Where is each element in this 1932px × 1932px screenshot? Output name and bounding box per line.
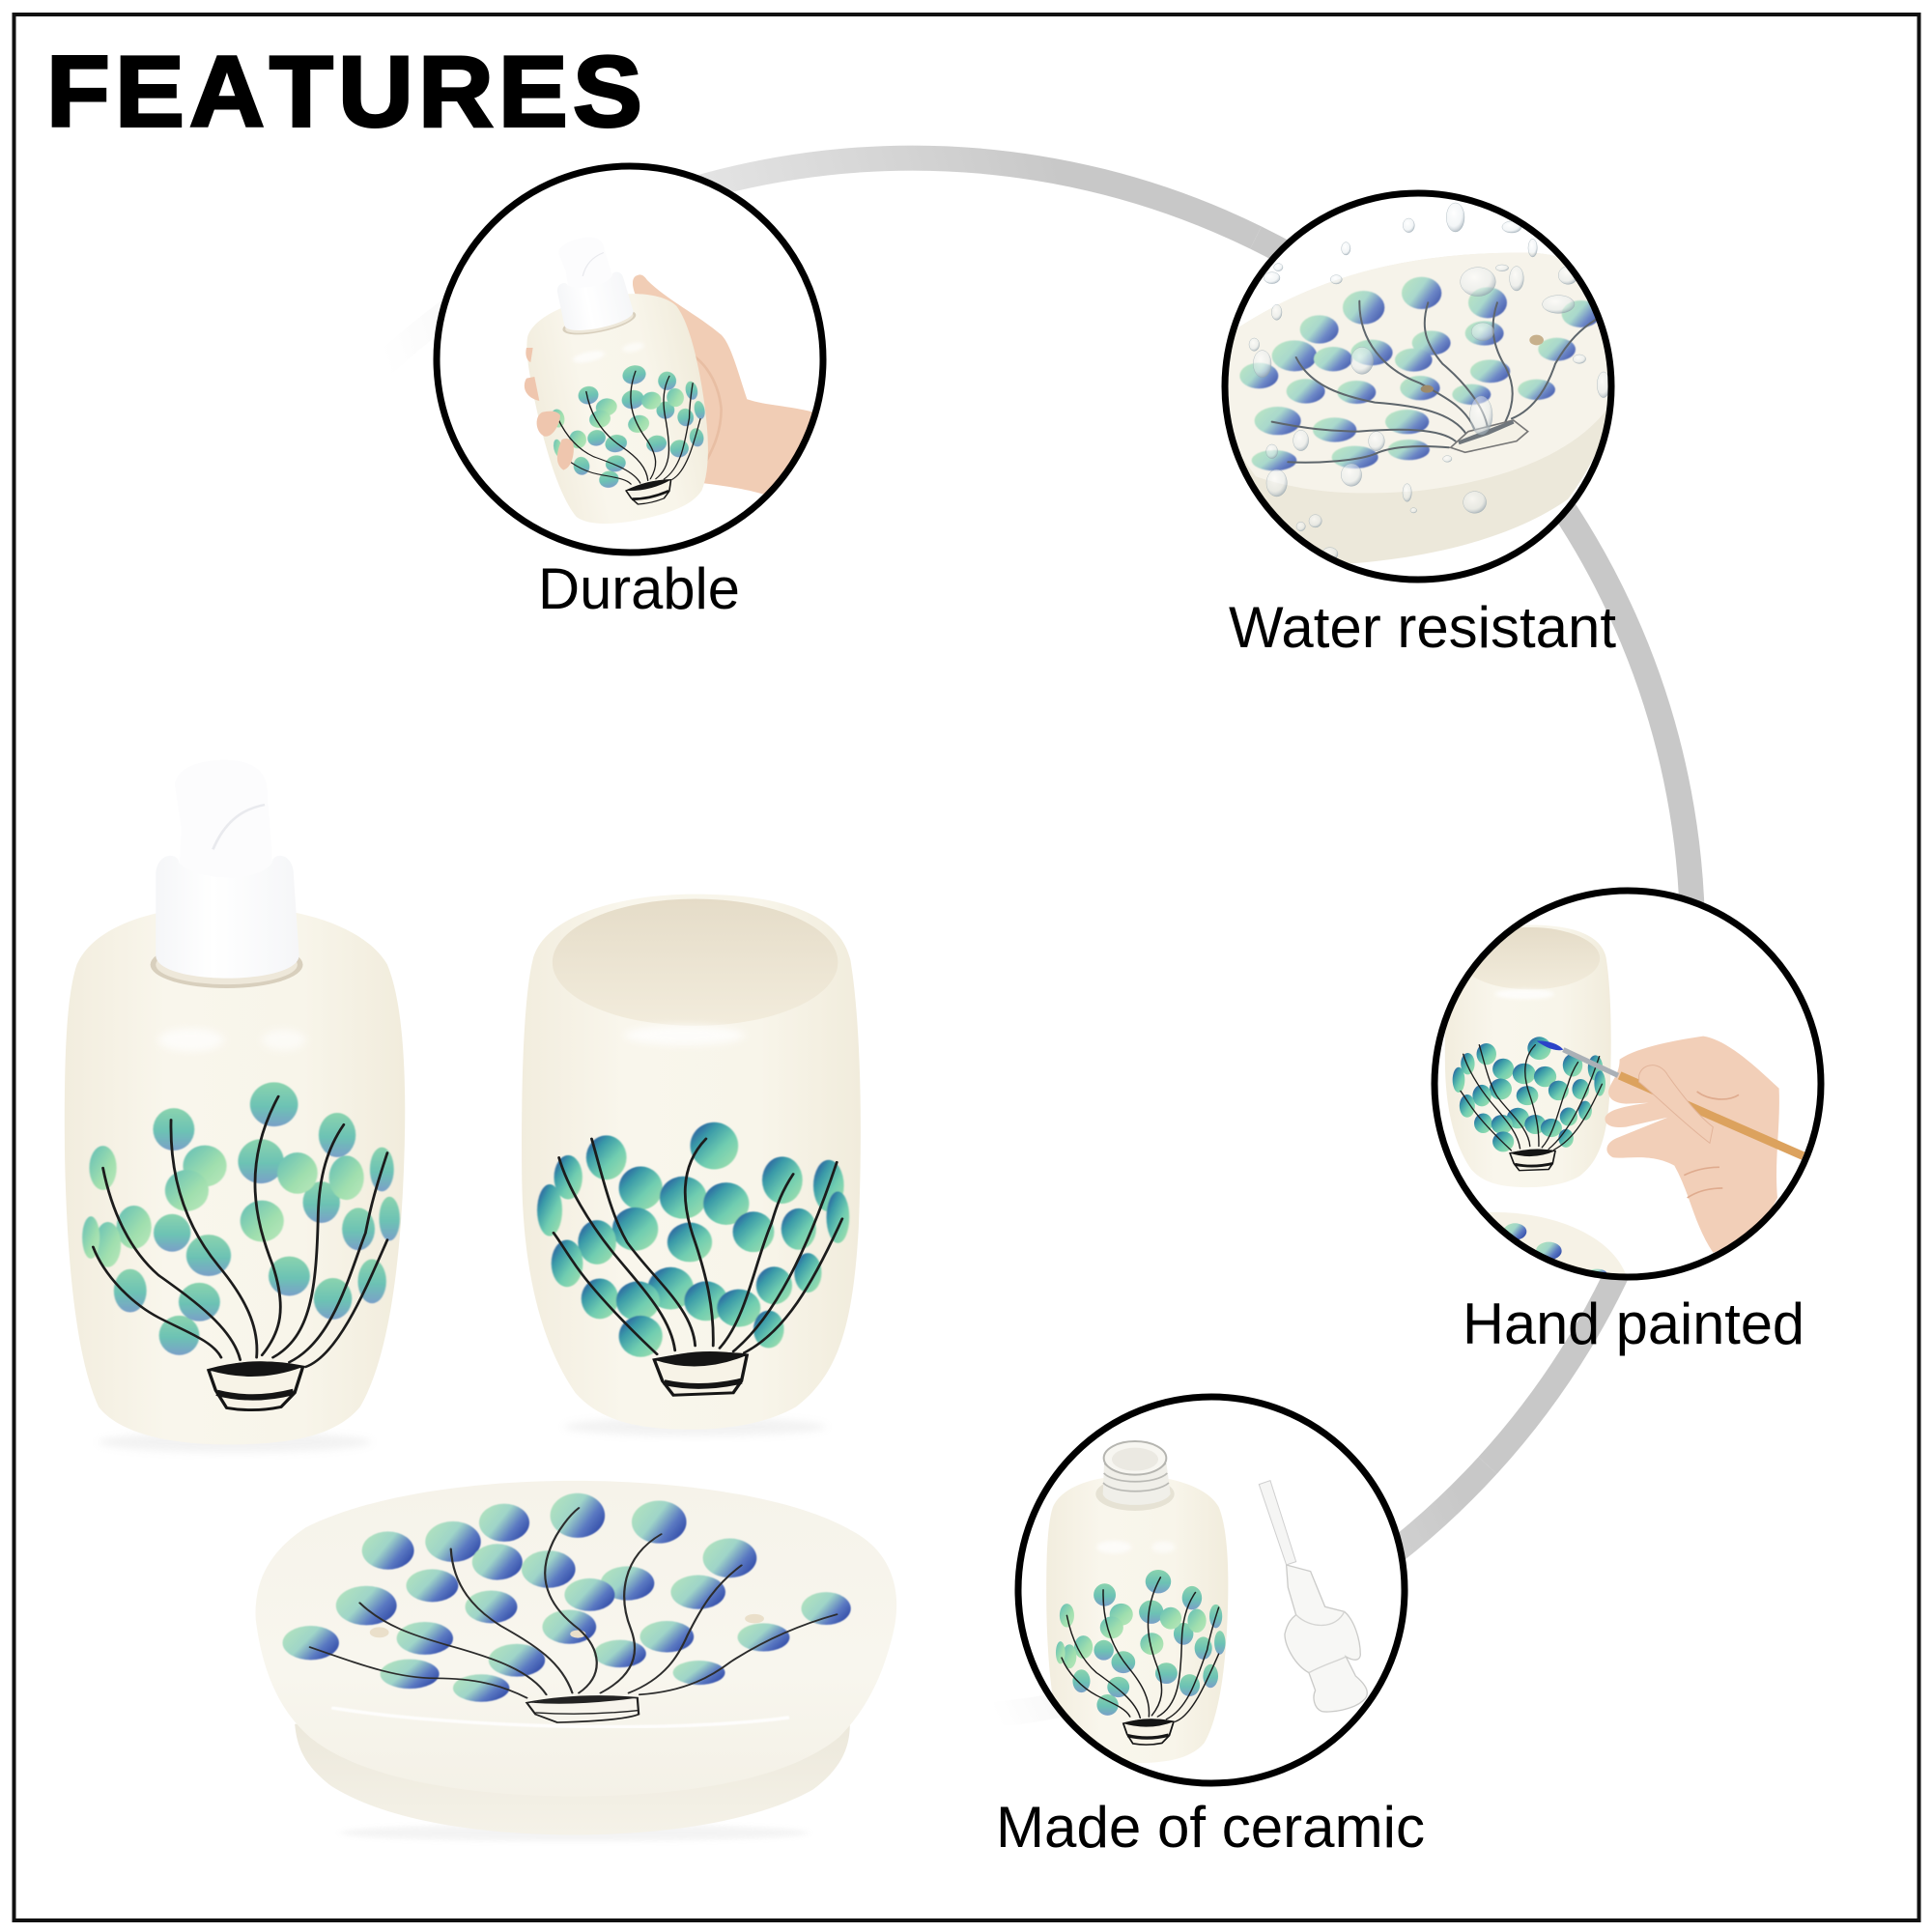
photo: hand painting cup	[1445, 925, 1804, 1288]
photo: bottle and removed pump	[1046, 1441, 1367, 1763]
label: made of ceramic: Made of ceramic	[996, 1795, 1425, 1860]
product: soap dispenser	[65, 760, 405, 1453]
connecting arc	[377, 158, 1692, 1715]
label: water resistant: Water resistant	[1229, 595, 1616, 660]
photo: soap dish with water drops	[1220, 203, 1623, 563]
feature: water resistant	[1220, 193, 1623, 660]
label: hand painted: Hand painted	[1463, 1292, 1804, 1356]
product: soap dish	[256, 1481, 896, 1841]
label: durable: Durable	[538, 556, 740, 621]
feature: made of ceramic	[996, 1397, 1425, 1860]
title: FEATURES	[46, 37, 647, 149]
feature: hand painted	[1435, 891, 1821, 1356]
feature: durable	[437, 166, 823, 621]
photo: hand holding dispenser	[524, 252, 812, 524]
product: tumbler	[522, 895, 861, 1436]
